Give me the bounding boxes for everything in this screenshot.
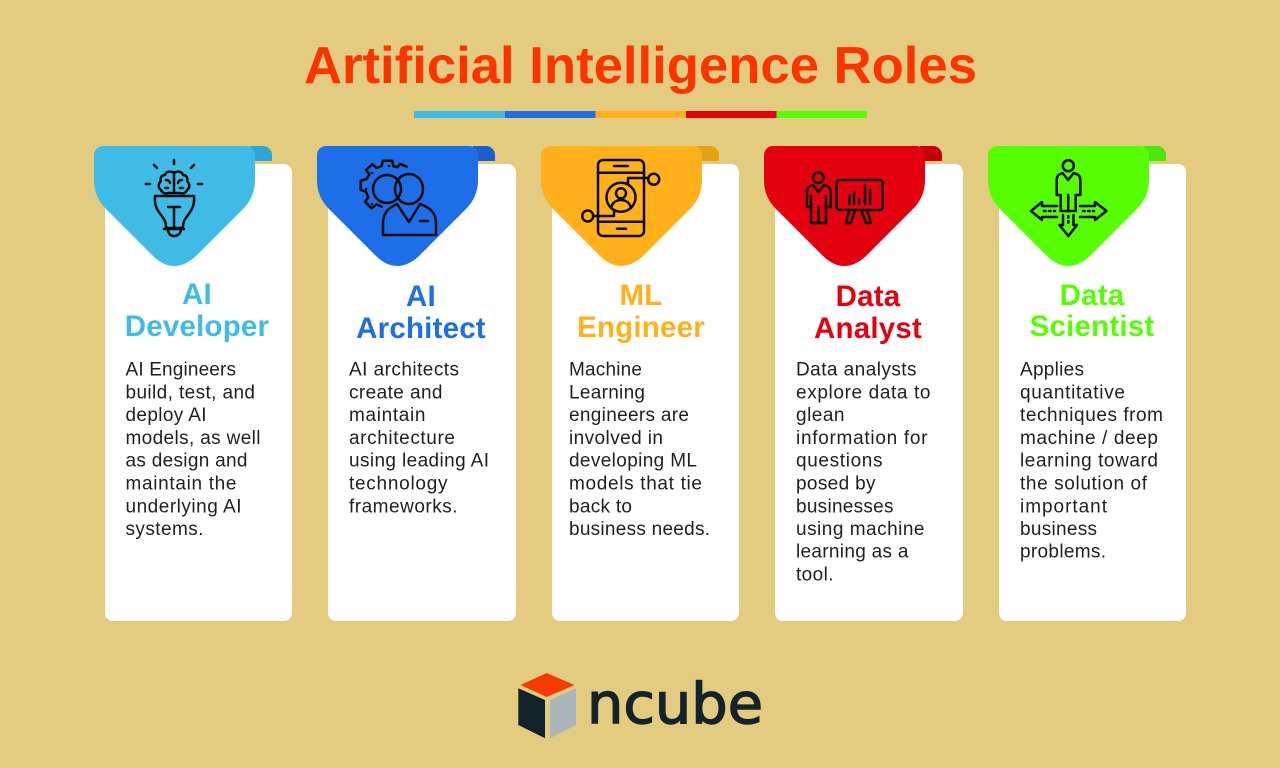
description: AI architects [349, 360, 459, 381]
description: maintain the [126, 474, 236, 494]
description: businesses [796, 496, 894, 517]
description: Learning [569, 382, 645, 404]
description [796, 360, 930, 586]
icon: brain light bulb [146, 160, 202, 236]
description: business needs. [569, 519, 710, 540]
heading: AI [406, 280, 436, 313]
description: systems. [126, 519, 204, 540]
wordmark: ncube [587, 672, 763, 737]
heading: Engineer [577, 311, 705, 344]
description: explore data to [796, 382, 930, 404]
description: models that tie [569, 474, 702, 494]
banner tab [697, 146, 719, 161]
heading: Developer [125, 310, 270, 343]
description: the solution of [1020, 474, 1148, 494]
description: glean [796, 405, 844, 426]
description: Applies [1020, 360, 1084, 381]
description: maintain [349, 405, 426, 426]
description: as design and [126, 451, 248, 472]
description: frameworks. [349, 496, 458, 517]
heading: Data [1060, 279, 1125, 312]
description: using machine [796, 519, 924, 540]
description: involved in [569, 428, 663, 449]
description: information for [796, 428, 928, 449]
description: machine / deep [1020, 428, 1158, 449]
description: AI Engineers [126, 360, 236, 381]
icon: gear and person [361, 161, 436, 235]
heading: Scientist [1030, 310, 1154, 343]
panel: ML Engineer [541, 146, 739, 621]
banner [94, 146, 255, 266]
icon: person at crossroads [1031, 160, 1106, 236]
icon: presenter with chart board [807, 172, 883, 223]
description: learning as a [796, 542, 909, 563]
heading: ML [620, 279, 662, 312]
colour divider bar [414, 111, 867, 118]
heading: Analyst [814, 312, 922, 345]
panel: Data Scientist [988, 146, 1186, 621]
description: tool. [796, 564, 834, 586]
description: learning toward [1020, 451, 1158, 472]
icon: cube [518, 673, 576, 738]
description: underlying AI [126, 496, 242, 517]
description: developing ML [569, 451, 697, 472]
description: create and [349, 382, 442, 404]
banner tab [920, 146, 942, 161]
description: posed by [796, 474, 876, 494]
description: build, test, and [126, 382, 255, 404]
icon: phone with profile [582, 160, 659, 236]
card background [775, 164, 963, 621]
description: models, as well [126, 428, 260, 449]
card background [999, 164, 1186, 621]
banner [764, 146, 925, 266]
panel: Data Analyst [764, 146, 963, 621]
card background [552, 164, 739, 621]
banner [317, 146, 478, 266]
card background [328, 164, 516, 621]
heading: Architect [356, 312, 486, 345]
banner tab [473, 146, 495, 161]
description: business [1020, 519, 1097, 540]
description: deploy AI [126, 405, 206, 426]
description: technology [349, 474, 448, 494]
banner tab [1144, 146, 1166, 161]
description: problems. [1020, 542, 1106, 563]
description [349, 360, 489, 517]
description [569, 360, 710, 540]
banner tab [250, 146, 272, 161]
description: back to [569, 496, 632, 517]
card background [105, 164, 292, 621]
description: questions [796, 451, 882, 472]
description: using leading AI [349, 451, 489, 472]
description [126, 360, 260, 540]
title: Artificial Intelligence Roles [304, 37, 977, 95]
description: Machine [569, 360, 642, 381]
description: quantitative [1020, 382, 1125, 404]
panel: AI Architect [317, 146, 516, 621]
banner [541, 146, 702, 266]
description: architecture [349, 428, 455, 449]
heading: Data [836, 280, 901, 313]
description [1020, 360, 1163, 563]
description: Data analysts [796, 360, 916, 381]
panel: AI Developer [94, 146, 292, 621]
heading: AI [182, 278, 212, 311]
description: techniques from [1020, 405, 1163, 426]
logo: ncube [518, 672, 763, 738]
description: important [1020, 496, 1108, 517]
banner [988, 146, 1149, 266]
description: engineers are [569, 405, 689, 426]
